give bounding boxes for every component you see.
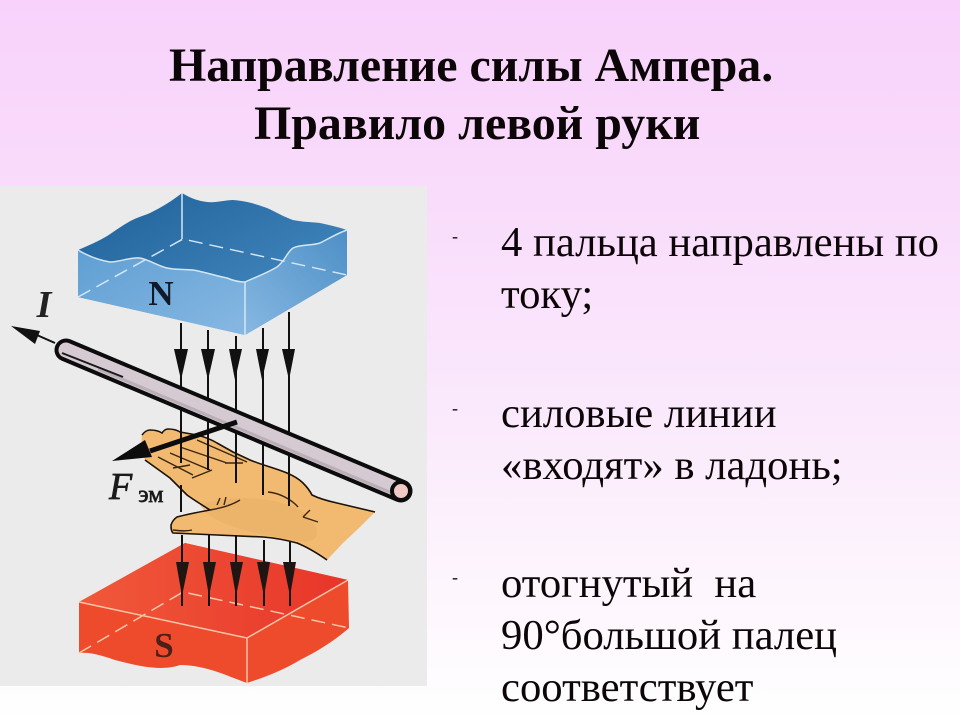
- force arrow: [108, 422, 237, 508]
- diagram: left hand rule: [0, 186, 427, 686]
- text: 90°большой палец: [501, 612, 837, 659]
- text: «входят» в ладонь;: [501, 442, 843, 489]
- bullet 1: -: [452, 226, 458, 246]
- text: отогнутый на: [501, 560, 756, 607]
- title: Направление силы Ампера.: [169, 39, 773, 92]
- current arrow: [11, 284, 55, 344]
- bullet 3: -: [452, 567, 458, 587]
- text: соответствует: [501, 664, 753, 711]
- label S: S: [154, 626, 174, 665]
- text: 4 пальца направлены по: [501, 219, 939, 266]
- conductor: [62, 350, 410, 500]
- S magnet: [79, 543, 349, 683]
- bullet 2: -: [452, 398, 458, 418]
- hand: [142, 429, 375, 560]
- label F: эм: [138, 482, 164, 508]
- label F: F: [109, 466, 132, 508]
- text: току;: [501, 271, 593, 318]
- label I: I: [36, 284, 53, 326]
- title: [169, 39, 773, 150]
- text: силовые линии: [501, 390, 777, 437]
- label N: N: [148, 274, 174, 313]
- N magnet: [78, 193, 347, 335]
- title: Правило левой руки: [254, 97, 700, 150]
- field lines: [174, 312, 296, 606]
- bullet text: [452, 219, 939, 711]
